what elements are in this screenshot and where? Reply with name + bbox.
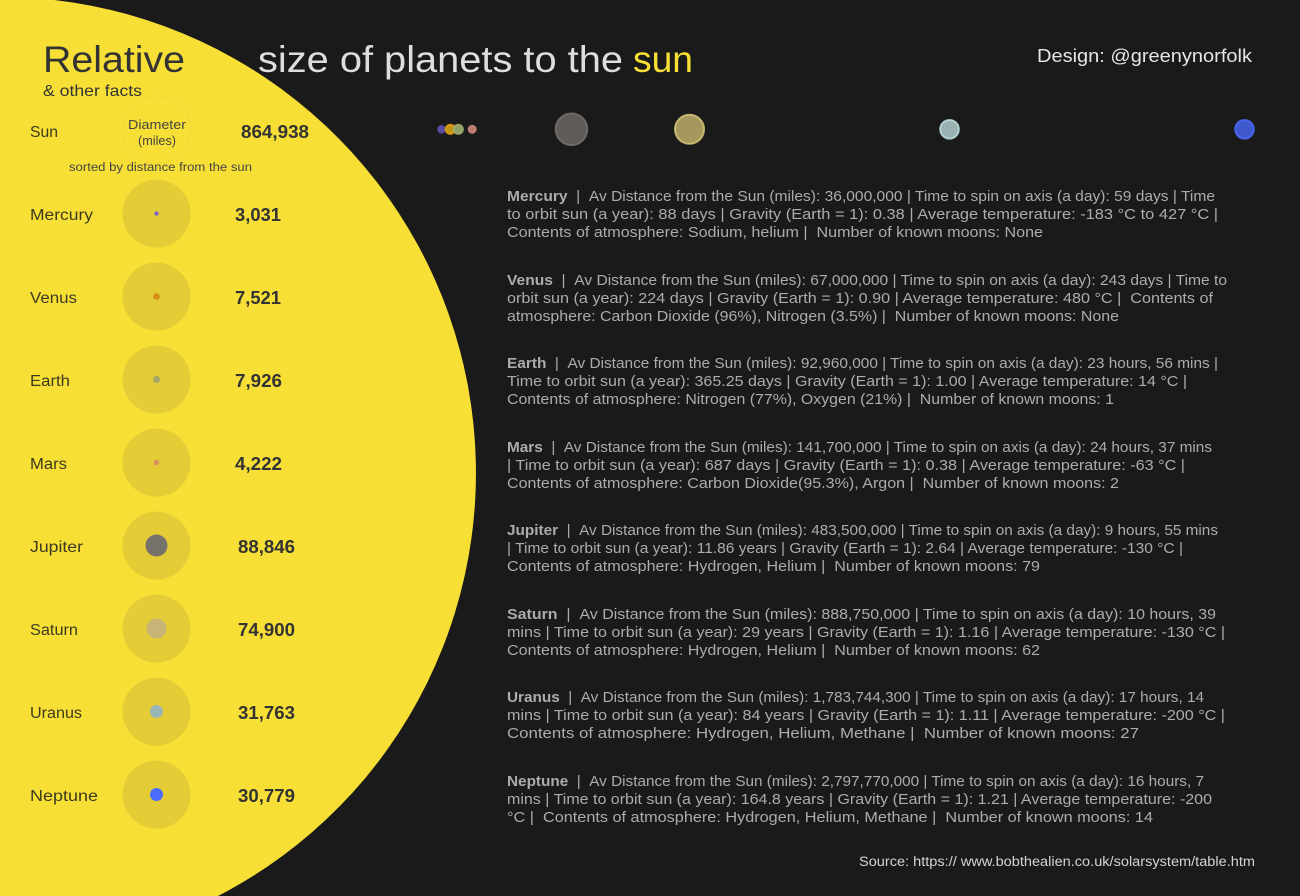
facts: Uranus: Contents of atmosphere: Hydrogen, Helium, Methane | Number of known moons: 27	[507, 725, 1139, 742]
facts: Earth: Contents of atmosphere: Nitrogen (77%), Oxygen (21%) | Number of known moons: 1	[507, 391, 1114, 408]
facts: Mercury: to orbit sun (a year): 88 days | Gravity (Earth = 1): 0.38 | Average temperature: -183 °C to 427 °C |	[507, 206, 1218, 223]
row: Jupiter	[30, 512, 295, 580]
facts: Jupiter: | Time to orbit sun (a year): 11.86 years | Gravity (Earth = 1): 2.64 | Average temperature: -130 °C |	[507, 540, 1183, 557]
row: Mercury: Mercury	[30, 207, 93, 224]
source: Source: https:// www.bobthealien.co.uk/solarsystem/table.htm	[859, 854, 1255, 869]
row: Earth	[30, 346, 282, 414]
row: Mercury	[30, 180, 281, 248]
sort note: sorted by distance from the sun	[69, 162, 252, 174]
row: Neptune: Neptune	[30, 788, 98, 805]
facts: Neptune: Neptune | Av Distance from the Sun (miles): 2,797,770,000 | Time to spin on axis (a day): 16 hours, 7	[507, 773, 1204, 790]
row: Uranus: Uranus	[30, 705, 82, 722]
row: Uranus: 31,763	[238, 703, 295, 723]
facts: Neptune: mins | Time to orbit sun (a year): 164.8 years | Gravity (Earth = 1): 1.21 | Average temperature: -200	[507, 791, 1212, 808]
facts: Saturn	[507, 606, 1225, 659]
facts: Jupiter	[507, 522, 1218, 575]
facts: Saturn: Saturn | Av Distance from the Sun (miles): 888,750,000 | Time to spin on axis (a day): 10 hours, 39	[507, 606, 1216, 623]
sun row: Sun	[30, 124, 58, 141]
row: Jupiter: 88,846	[238, 537, 295, 557]
title: sun	[633, 39, 693, 80]
facts: Earth: Time to orbit sun (a year): 365.25 days | Gravity (Earth = 1): 1.00 | Average temperature: 14 °C |	[507, 373, 1187, 390]
facts: Uranus	[507, 689, 1225, 742]
sun row: 864,938	[241, 122, 309, 142]
facts: Venus: Venus | Av Distance from the Sun (miles): 67,000,000 | Time to spin on axis (a day): 243 days | Time to	[507, 272, 1227, 289]
facts: Mercury: Mercury | Av Distance from the Sun (miles): 36,000,000 | Time to spin on axis (a day): 59 days | Time	[507, 188, 1215, 205]
subtitle: & other facts	[43, 83, 142, 100]
row: Saturn: Saturn	[30, 622, 78, 639]
facts: Mars: Mars | Av Distance from the Sun (miles): 141,700,000 | Time to spin on axis (a day): 24 hours, 37 mins	[507, 439, 1212, 456]
row: Earth: 7,926	[235, 371, 282, 391]
row: Uranus	[30, 678, 295, 746]
title: Relative	[43, 39, 185, 80]
row: Mars: 4,222	[235, 454, 282, 474]
facts: Mars: | Time to orbit sun (a year): 687 days | Gravity (Earth = 1): 0.38 | Average temperature: -63 °C |	[507, 457, 1185, 474]
sun: large yellow circle, cropped by the frame	[0, 0, 476, 896]
row: Mars	[30, 429, 282, 497]
row: Venus	[30, 263, 281, 331]
sun row	[30, 96, 309, 164]
row: Saturn: 74,900	[238, 620, 295, 640]
row: Neptune: 30,779	[238, 786, 295, 806]
facts: Earth: Earth | Av Distance from the Sun (miles): 92,960,000 | Time to spin on axis (a day): 23 hours, 56 mins |	[507, 355, 1218, 372]
facts: Mars: Contents of atmosphere: Carbon Dioxide(95.3%), Argon | Number of known moons: 2	[507, 475, 1119, 492]
facts: Uranus: Uranus | Av Distance from the Sun (miles): 1,783,744,300 | Time to spin on axis (a day): 17 hours, 14	[507, 689, 1204, 706]
title	[43, 39, 693, 80]
row: Saturn	[30, 595, 295, 663]
row: Mercury: 3,031	[235, 205, 281, 225]
facts: Jupiter: Contents of atmosphere: Hydrogen, Helium | Number of known moons: 79	[507, 558, 1040, 575]
sun row: Diameter	[128, 118, 186, 132]
facts: Venus	[507, 272, 1227, 325]
facts: Neptune: °C | Contents of atmosphere: Hydrogen, Helium, Methane | Number of known moons: 14	[507, 809, 1153, 826]
distance scale: planets positioned by distance from the sun	[438, 114, 1254, 145]
facts: Venus: atmosphere: Carbon Dioxide (96%), Nitrogen (3.5%) | Number of known moons: None	[507, 308, 1119, 325]
row: Venus: 7,521	[235, 288, 281, 308]
row: Neptune	[30, 761, 295, 829]
row: Jupiter: Jupiter	[30, 539, 83, 556]
facts: Jupiter: Jupiter | Av Distance from the Sun (miles): 483,500,000 | Time to spin on axis (a day): 9 hours, 55 mins	[507, 522, 1218, 539]
row: Venus: Venus	[30, 290, 77, 307]
facts: Saturn: Contents of atmosphere: Hydrogen, Helium | Number of known moons: 62	[507, 642, 1040, 659]
facts: Saturn: mins | Time to orbit sun (a year): 29 years | Gravity (Earth = 1): 1.16 | Average temperature: -130 °C |	[507, 624, 1225, 641]
facts: Mercury	[507, 188, 1218, 241]
sun row: (miles)	[138, 134, 176, 148]
facts: Mercury: Contents of atmosphere: Sodium, helium | Number of known moons: None	[507, 224, 1043, 241]
credit: Design: @greenynorfolk	[1037, 46, 1253, 66]
facts: Earth	[507, 355, 1218, 408]
facts: Neptune	[507, 773, 1212, 826]
row: Earth: Earth	[30, 373, 70, 390]
facts: Uranus: mins | Time to orbit sun (a year): 84 years | Gravity (Earth = 1): 1.11 | Average temperature: -200 °C |	[507, 707, 1225, 724]
facts: Venus: orbit sun (a year): 224 days | Gravity (Earth = 1): 0.90 | Average temperature: 480 °C | Contents of	[507, 290, 1214, 307]
facts: Mars	[507, 439, 1212, 492]
title: size of planets to the	[258, 39, 623, 80]
row: Mars: Mars	[30, 456, 67, 473]
